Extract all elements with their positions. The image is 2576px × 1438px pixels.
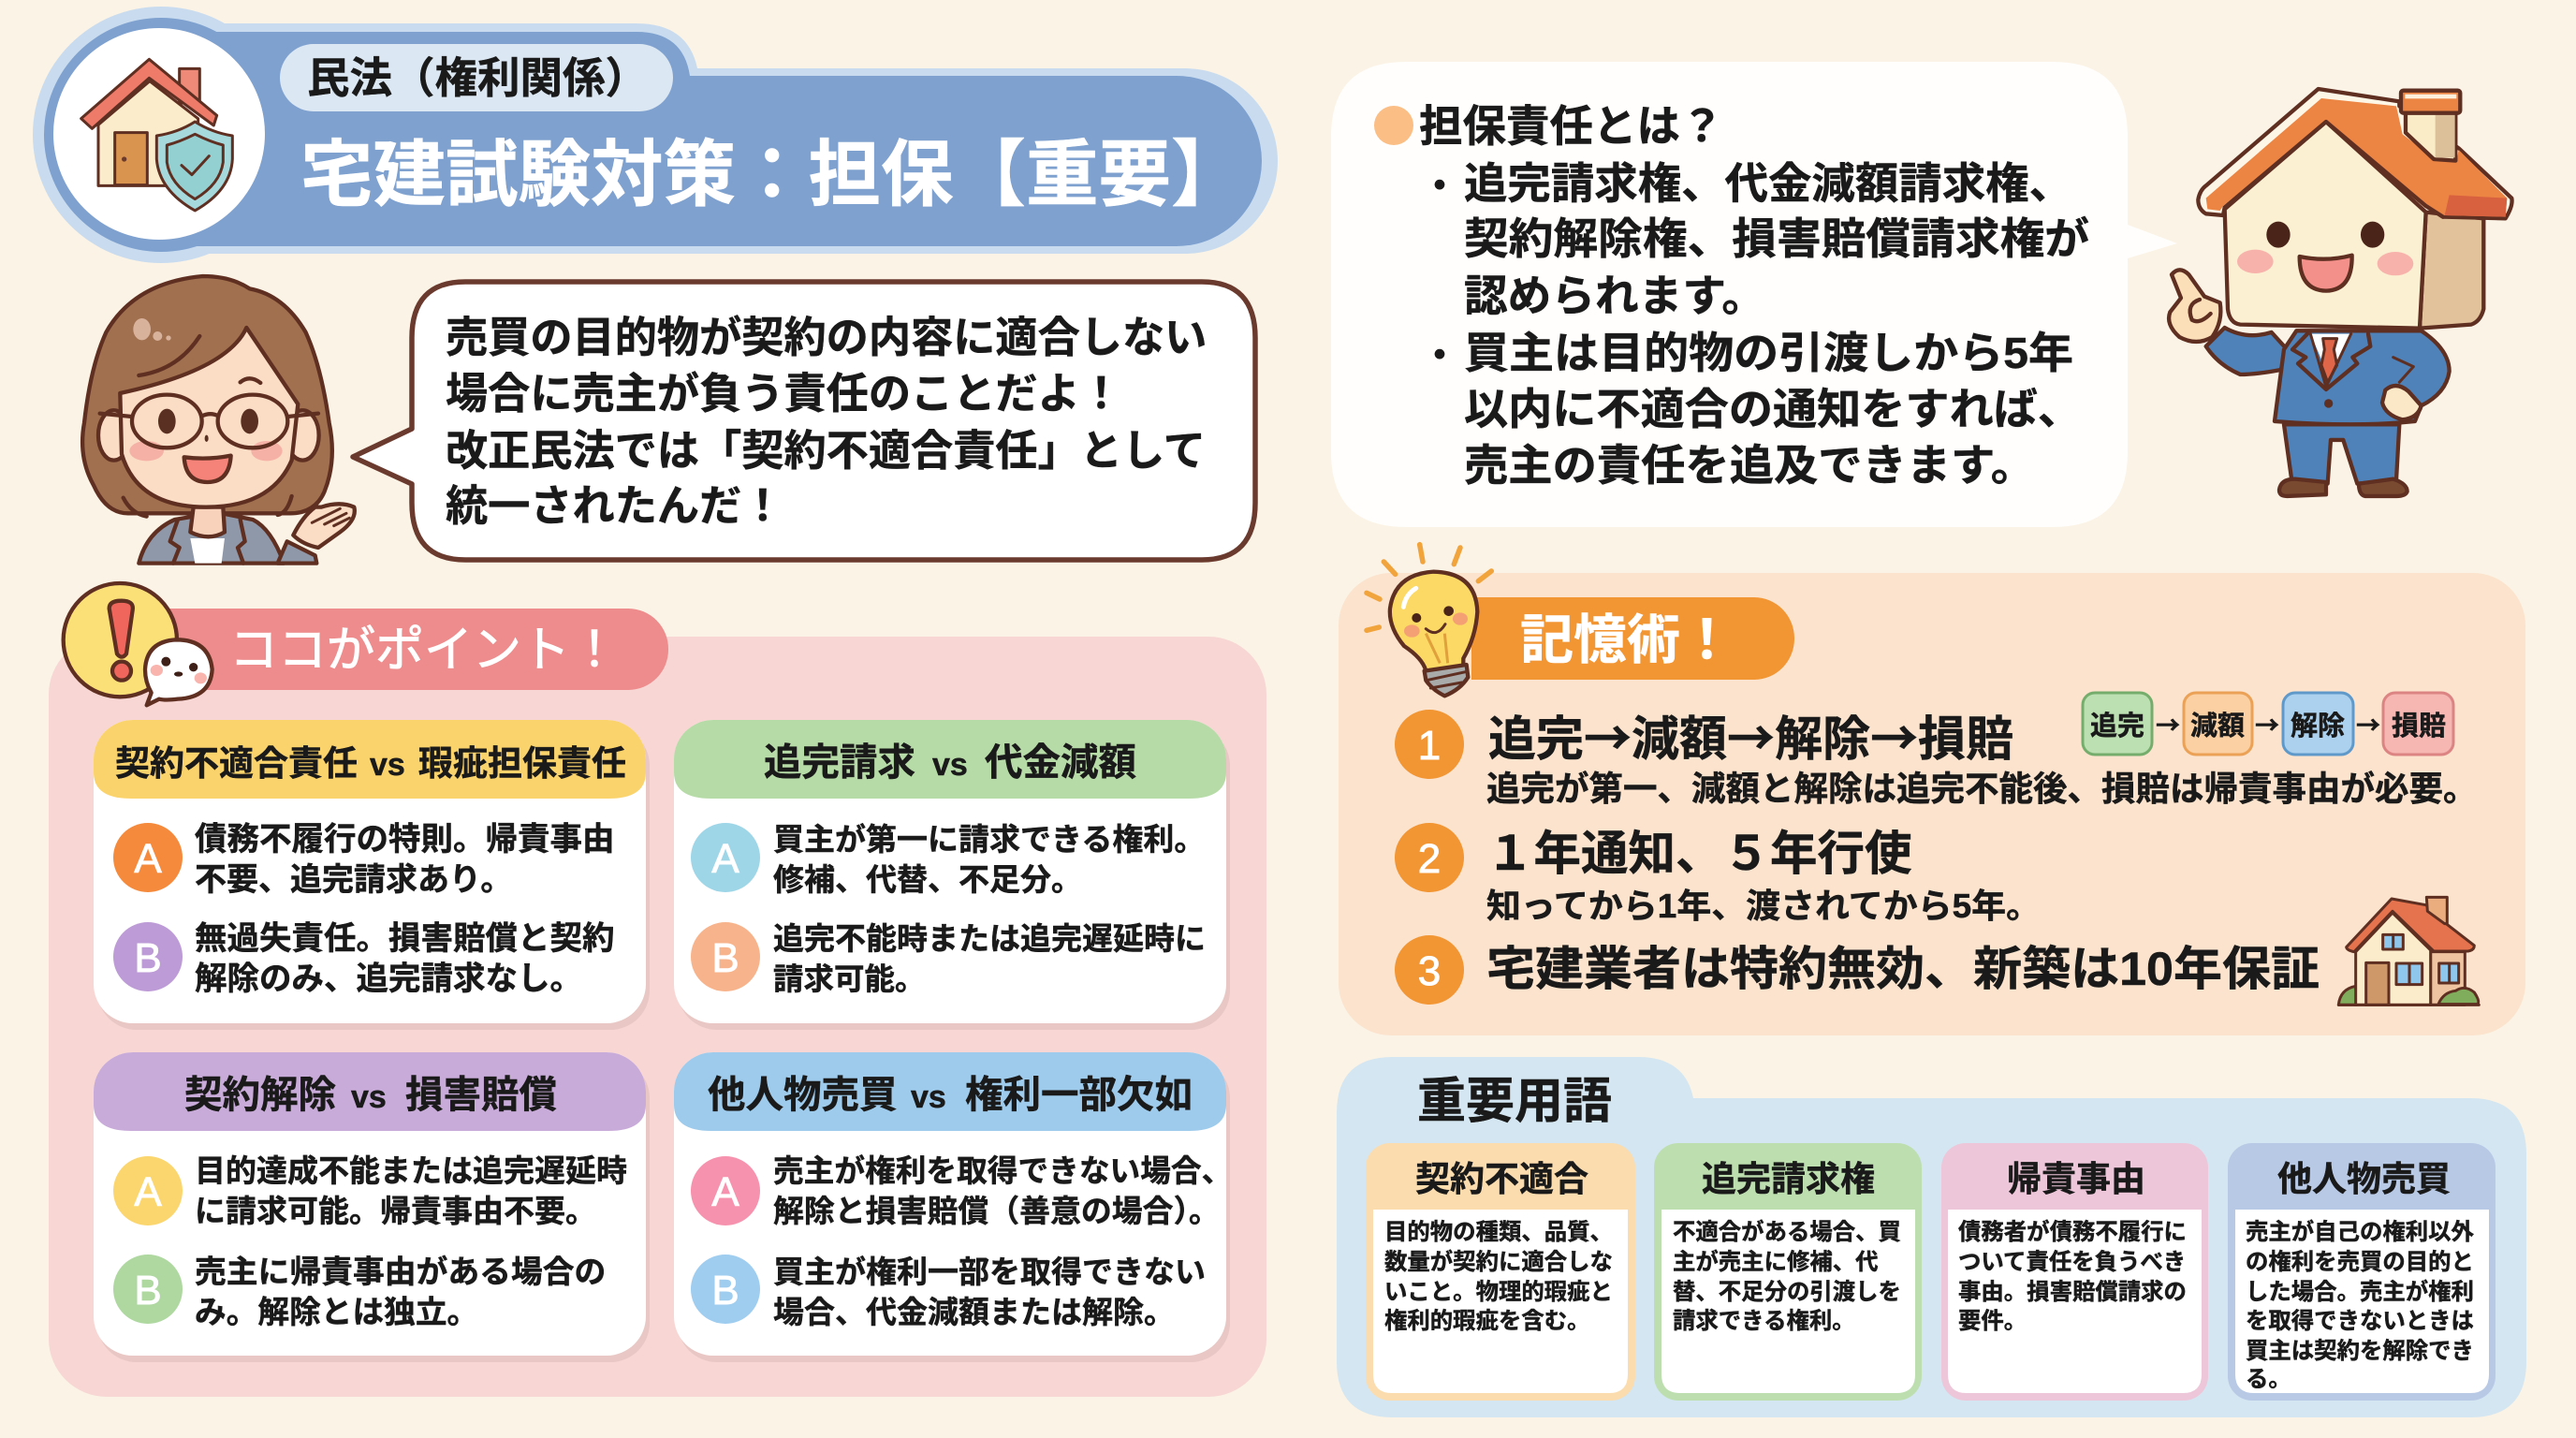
character: house mascot in suit xyxy=(2169,89,2512,496)
card: 契約不適合責任 vs 瑕疵担保責任: 瑕疵担保責任 xyxy=(418,744,626,783)
card: 他人物売買 vs 権利一部欠如: B xyxy=(711,1268,739,1313)
speech bubble: 担保責任とは: 認められます。 xyxy=(1464,271,1765,320)
flow chips: 減額 xyxy=(2190,711,2245,741)
card: 契約解除 vs 損害賠償: 損害賠償 xyxy=(405,1073,557,1116)
term card: 契約不適合: いこと。物理的瑕疵と xyxy=(1384,1280,1613,1305)
card: 追完請求 vs 代金減額: A xyxy=(711,836,739,882)
subtitle pill xyxy=(280,44,673,111)
card: 契約不適合責任 vs 瑕疵担保責任: B xyxy=(134,935,162,981)
card: 契約不適合責任 vs 瑕疵担保責任: A xyxy=(134,836,162,882)
speech bubble: 担保責任とは: 売主の責任を追及できます。 xyxy=(1464,441,2035,490)
card: 他人物売買 vs 権利一部欠如: 他人物売買 xyxy=(708,1073,897,1116)
panel heading: 重要用語 xyxy=(1417,1075,1612,1129)
term card: 追完請求権 xyxy=(1654,1143,1922,1401)
panel: 記憶術 xyxy=(1339,545,2525,1035)
card: 契約解除 vs 損害賠償: 契約解除 xyxy=(184,1073,336,1116)
panel heading xyxy=(122,609,668,690)
term card: 他人物売買: 他人物売買 xyxy=(2277,1160,2451,1198)
term card: 帰責事由 xyxy=(1941,1143,2208,1401)
flow chips: 追完 xyxy=(2090,711,2144,741)
term card: 帰責事由: 債務者が債務不履行に xyxy=(1958,1219,2187,1245)
card: 契約不適合責任 vs 瑕疵担保責任: 解除のみ、追完請求なし。 xyxy=(195,961,582,997)
card: 契約不適合責任 vs 瑕疵担保責任: 不要、追完請求あり。 xyxy=(195,862,512,898)
mnemonic 1: 追完が第一、減額と解除は追完不能後、損賠は帰責事由が必要。 xyxy=(1486,770,2477,808)
speech bubble: 担保責任とは: ・ xyxy=(1421,166,1458,207)
speech bubble: woman xyxy=(353,282,1255,560)
card: 追完請求 vs 代金減額: 追完請求 xyxy=(764,741,915,784)
card: 追完請求 vs 代金減額: 代金減額 xyxy=(985,741,1136,784)
term card: 追完請求権: 不適合がある場合、買 xyxy=(1673,1219,1901,1245)
panel heading xyxy=(1471,597,1794,680)
term card: 帰責事由: 帰責事由 xyxy=(2007,1160,2145,1198)
card: 他人物売買 vs 権利一部欠如: 売主が権利を取得できない場合、 xyxy=(773,1153,1232,1188)
icon: exclamation and ghost bubble xyxy=(64,583,212,705)
card: 他人物売買 vs 権利一部欠如: 解除と損害賠償（善意の場合）。 xyxy=(773,1194,1220,1228)
term card: 他人物売買: の権利を売買の目的と xyxy=(2246,1250,2474,1275)
mnemonic 3: 3 xyxy=(1418,948,1441,994)
panel: ここがポイント xyxy=(49,583,1266,1397)
card: 他人物売買 vs 権利一部欠如 xyxy=(674,1052,1232,1362)
card: 契約不適合責任 vs 瑕疵担保責任: vs xyxy=(370,747,405,783)
character: woman with glasses xyxy=(82,276,355,564)
speech bubble: 担保責任とは: 買主は目的物の引渡しから5年 xyxy=(1464,329,2073,377)
card: 他人物売買 vs 権利一部欠如: 買主が権利一部を取得できない xyxy=(773,1255,1206,1289)
card: 追完請求 vs 代金減額: vs xyxy=(932,747,968,783)
term card: 帰責事由: 要件。 xyxy=(1958,1309,2027,1334)
speech bubble: 担保責任とは: 追完請求権、代金減額請求権、 xyxy=(1464,159,2072,208)
term card: 追完請求権: 追完請求権 xyxy=(1702,1160,1875,1198)
term card: 他人物売買 xyxy=(2228,1143,2496,1401)
flow chips: → xyxy=(2255,707,2279,741)
flow chips: 損賠 xyxy=(2392,711,2446,741)
flow chips: → xyxy=(2156,707,2180,741)
panel heading: 記憶術！ xyxy=(1520,610,1734,670)
speech bubble: 担保責任とは: ・ xyxy=(1421,335,1458,376)
card: 契約解除 vs 損害賠償: vs xyxy=(351,1079,387,1115)
card: 契約解除 vs 損害賠償: み。解除とは独立。 xyxy=(195,1295,478,1330)
term card: 契約不適合 xyxy=(1366,1143,1635,1401)
speech bubble: 担保責任とは: 担保責任とは？ xyxy=(1419,102,1724,151)
term card: 他人物売買: 買主は契約を解除でき xyxy=(2246,1339,2474,1364)
card: 追完請求 vs 代金減額: 追完不能時または追完遅延時に xyxy=(773,921,1206,956)
term card: 追完請求権: 替、不足分の引渡しを xyxy=(1673,1280,1901,1305)
title banner xyxy=(33,7,1278,263)
term card: 他人物売買: を取得できないときは xyxy=(2246,1309,2474,1334)
subtitle pill: 民法（権利関係） xyxy=(307,54,648,102)
term card: 帰責事由: ついて責任を負うべき xyxy=(1958,1250,2186,1275)
card: 契約不適合責任 vs 瑕疵担保責任 xyxy=(94,720,650,1030)
card: 追完請求 vs 代金減額: 請求可能。 xyxy=(773,962,926,996)
card: 追完請求 vs 代金減額: B xyxy=(711,935,739,981)
main title: 宅建試験対策：担保【重要】 xyxy=(300,135,1244,215)
term card: 契約不適合: 数量が契約に適合しな xyxy=(1384,1249,1613,1275)
card: 契約不適合責任 vs 瑕疵担保責任: 無過失責任。損害賠償と契約 xyxy=(195,921,614,957)
term card: 追完請求権: 主が売主に修補、代 xyxy=(1673,1249,1879,1275)
flow chips: → xyxy=(2356,707,2380,741)
card: 契約解除 vs 損害賠償: B xyxy=(134,1268,162,1313)
card: 契約不適合責任 vs 瑕疵担保責任: 契約不適合責任 xyxy=(115,744,358,783)
card: 契約不適合責任 vs 瑕疵担保責任: 債務不履行の特則。帰責事由 xyxy=(195,822,614,858)
card: 契約解除 vs 損害賠償: に請求可能。帰責事由不要。 xyxy=(195,1194,596,1228)
card: 契約解除 vs 損害賠償: A xyxy=(134,1169,162,1215)
mnemonic 1 xyxy=(1395,700,2477,808)
mnemonic 2 xyxy=(1395,823,2041,925)
speech bubble: 担保責任とは: 以内に不適合の通知をすれば、 xyxy=(1464,385,2082,433)
mnemonic 1: 追完→減額→解除→損賠 xyxy=(1488,700,2013,770)
card: 追完請求 vs 代金減額: 買主が第一に請求できる権利。 xyxy=(773,822,1205,857)
card: 他人物売買 vs 権利一部欠如: 権利一部欠如 xyxy=(965,1073,1193,1116)
panel: 重要用語 xyxy=(1337,1057,2526,1417)
card: 他人物売買 vs 権利一部欠如: vs xyxy=(911,1079,946,1115)
mnemonic 2: 知ってから1年、渡されてから5年。 xyxy=(1486,887,2041,925)
panel heading: ココがポイント！ xyxy=(229,624,619,678)
mnemonic 3: 宅建業者は特約無効、新築は10年保証 xyxy=(1486,943,2320,995)
speech bubble: woman: 売買の目的物が契約の内容に適合しない xyxy=(446,314,1207,361)
term card: 他人物売買: した場合。売主が権利 xyxy=(2246,1279,2474,1305)
card: 追完請求 vs 代金減額: 修補、代替、不足分。 xyxy=(773,862,1082,897)
card: 他人物売買 vs 権利一部欠如: 場合、代金減額または解除。 xyxy=(773,1295,1175,1329)
card: 他人物売買 vs 権利一部欠如: A xyxy=(711,1169,739,1215)
term card: 帰責事由: 事由。損害賠償請求の xyxy=(1958,1280,2187,1305)
term card: 追完請求権: 請求できる権利。 xyxy=(1673,1309,1855,1334)
card: 契約解除 vs 損害賠償: 売主に帰責事由がある場合の xyxy=(195,1254,606,1290)
term card: 他人物売買: る。 xyxy=(2246,1367,2291,1392)
mnemonic 1: 1 xyxy=(1418,723,1441,769)
speech bubble: woman: 場合に売主が負う責任のことだよ！ xyxy=(446,370,1122,418)
icon: house and shield xyxy=(81,59,232,211)
speech bubble: 担保責任とは: 契約解除権、損害賠償請求権が xyxy=(1464,214,2089,263)
term card: 契約不適合: 契約不適合 xyxy=(1415,1160,1588,1198)
icon: light bulb xyxy=(1367,545,1491,696)
term card: 他人物売買: 売主が自己の権利以外 xyxy=(2246,1219,2475,1245)
speech bubble: woman: 改正民法では「契約不適合責任」として xyxy=(446,427,1206,475)
term card: 契約不適合: 権利的瑕疵を含む。 xyxy=(1384,1309,1590,1334)
mnemonic 3 xyxy=(1395,935,2320,1005)
speech bubble: woman: 統一されたんだ！ xyxy=(446,482,784,530)
flow chips: 解除 xyxy=(2291,711,2345,741)
card: 契約解除 vs 損害賠償 xyxy=(94,1052,650,1362)
card: 追完請求 vs 代金減額 xyxy=(674,720,1230,1030)
flow chips xyxy=(2083,693,2453,755)
card: 契約解除 vs 損害賠償: 目的達成不能または追完遅延時 xyxy=(195,1153,627,1188)
mnemonic 2: 2 xyxy=(1418,836,1441,882)
icon: small house xyxy=(2338,897,2479,1005)
mnemonic 2: １年通知、５年行使 xyxy=(1486,827,1911,880)
speech bubble: 担保責任とは xyxy=(1331,62,2177,527)
term card: 契約不適合: 目的物の種類、品質、 xyxy=(1384,1220,1613,1245)
